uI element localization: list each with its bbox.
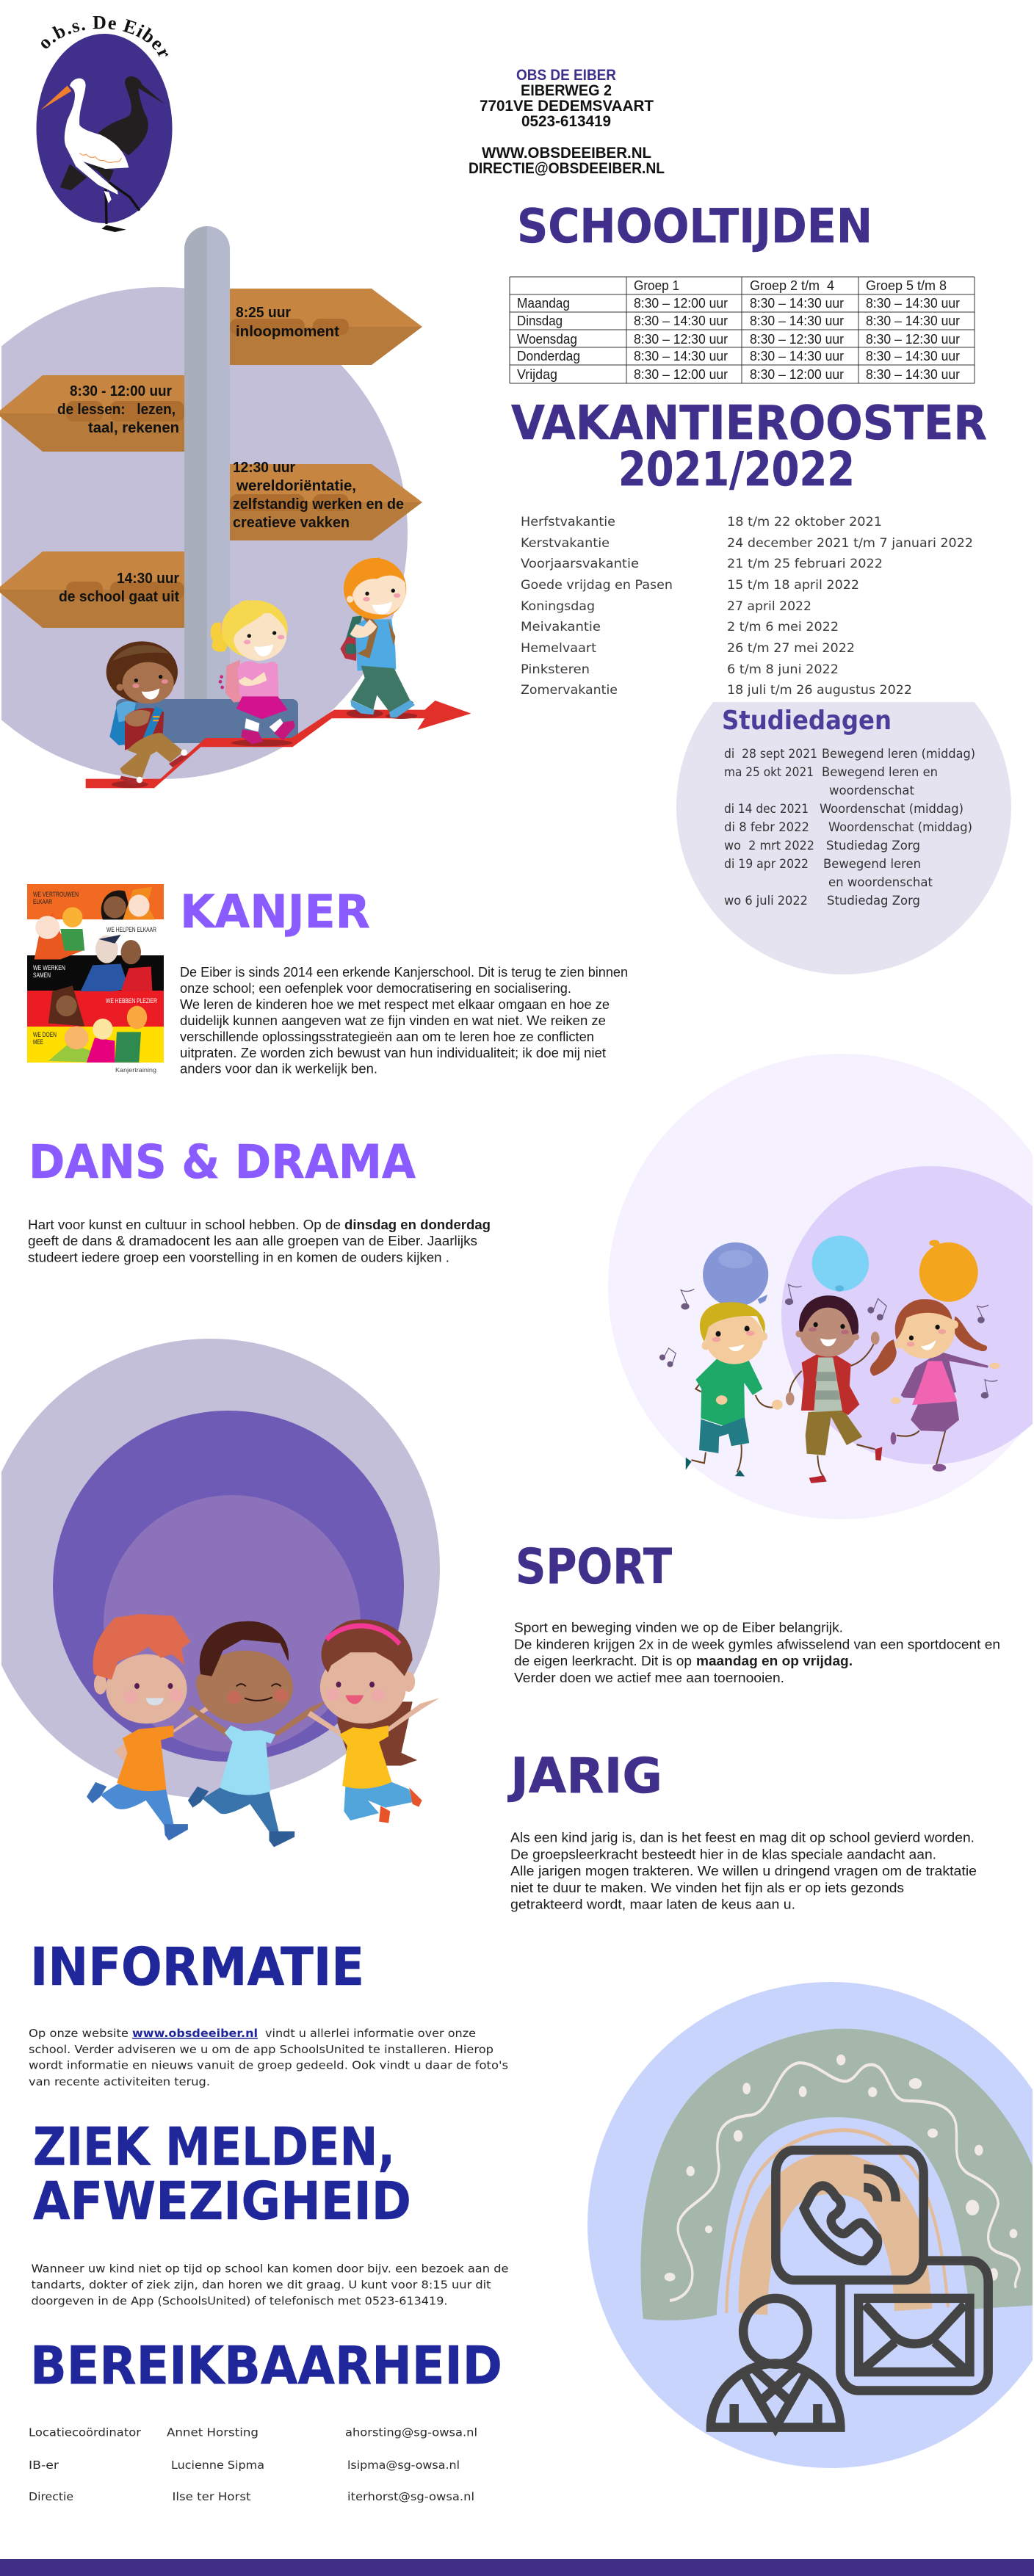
heading: sport: SPORT bbox=[516, 1538, 672, 1595]
text: dans en drama body: dinsdag en donderdag bbox=[344, 1218, 491, 1232]
balloon: blue bbox=[703, 1242, 768, 1306]
studiedagen title: Studiedagen bbox=[722, 706, 892, 736]
list: vacations bbox=[521, 515, 973, 698]
heading: vakantierooster bbox=[511, 396, 987, 497]
text: kanjer body bbox=[180, 965, 628, 1077]
poster: kanjer rules: WE VERTROUWEN bbox=[33, 891, 79, 898]
table: school times: 8:30 – 12:30 uur bbox=[750, 332, 844, 347]
table: school times: 8:30 – 12:00 uur bbox=[634, 367, 728, 382]
text: kanjer body: anders voor dan ik werkelijk ben. bbox=[180, 1062, 377, 1077]
studiedagen list bbox=[724, 747, 975, 908]
contact list: lsipma@sg-owsa.nl bbox=[347, 2459, 460, 2472]
sign: 14:30 de school gaat uit: 14:30 uur bbox=[117, 571, 179, 587]
table: school times: 8:30 – 14:30 uur bbox=[634, 349, 728, 363]
heading: ziek melden, afwezigheid: ZIEK MELDEN, bbox=[33, 2116, 395, 2177]
poster: kanjer rules: WE DOEN bbox=[33, 1031, 57, 1038]
text: sport body: De kinderen krijgen 2x in de week gymles afwisselend van een sportdocent en bbox=[514, 1638, 1000, 1652]
table: school times: Vrijdag bbox=[517, 367, 557, 382]
poster: kanjer rules: MEE bbox=[33, 1038, 43, 1046]
list: vacations: 15 t/m 18 april 2022 bbox=[727, 578, 859, 593]
studiedagen list: Studiedag Zorg bbox=[826, 839, 920, 853]
sign: 8:25 inloopmoment: 8:25 uur bbox=[236, 305, 291, 321]
table: school times: Woensdag bbox=[517, 332, 577, 347]
text: jarig body: Als een kind jarig is, dan is het feest en mag dit op school gevierd worden. bbox=[510, 1830, 975, 1845]
text: informatie body: www.obsdeeiber.nl bbox=[132, 2027, 258, 2040]
address block: 7701VE DEDEMSVAART bbox=[480, 98, 654, 115]
heading: kanjer: KANJER bbox=[180, 885, 370, 938]
text: ziek melden body: Wanneer uw kind niet op tijd op school kan komen door bijv. een bezoek aan de bbox=[31, 2262, 508, 2275]
text: jarig body: Alle jarigen mogen trakteren. We willen u dringend vragen om de traktatie bbox=[510, 1864, 977, 1878]
text: kanjer body: De Eiber is sinds 2014 een erkende Kanjerschool. Dit is terug te zien binnen bbox=[180, 965, 628, 980]
table: school times: Groep 2 t/m 4 bbox=[750, 278, 834, 293]
studiedagen list: Bewegend leren (middag) bbox=[822, 747, 975, 761]
table: school times: 8:30 – 12:30 uur bbox=[634, 332, 728, 347]
panel: studiedagen bbox=[676, 702, 1011, 974]
address block: WWW.OBSDEEIBER.NL bbox=[482, 145, 651, 162]
red stair arrow bbox=[86, 701, 471, 788]
poster: kanjer rules: SAMEN bbox=[33, 972, 51, 979]
sign: 8:30 - 12:00 de lessen bbox=[0, 375, 184, 452]
studiedagen list: Bewegend leren en bbox=[822, 765, 938, 779]
text: informatie body bbox=[29, 2027, 508, 2088]
table: school times: Donderdag bbox=[517, 349, 580, 363]
list: vacations: Meivakantie bbox=[521, 620, 601, 634]
poster: kanjer rules: Kanjertraining bbox=[115, 1067, 156, 1074]
studiedagen list: Studiedag Zorg bbox=[827, 894, 920, 908]
text: kanjer body: verschillende oplossingsstrategieën aan om te leren hoe ze conflicten bbox=[180, 1030, 594, 1044]
contact list: Annet Horsting bbox=[167, 2426, 258, 2439]
address block: OBS DE EIBER bbox=[516, 67, 616, 84]
address block: 0523-613419 bbox=[521, 113, 611, 130]
text: sport body: Verder doen we actief mee aan toernooien. bbox=[514, 1671, 784, 1685]
list: vacations: Goede vrijdag en Pasen bbox=[521, 578, 673, 593]
text: informatie body: wordt informatie en nieuws vanuit de groep gedeeld. Ook vindt u daar de foto's bbox=[29, 2059, 508, 2072]
text: ziek melden body: doorgeven in de App (SchoolsUnited) of telefonisch met 0523-613419. bbox=[31, 2295, 448, 2308]
list: vacations: Zomervakantie bbox=[521, 683, 618, 698]
sign: 14:30 de school gaat uit bbox=[0, 551, 184, 628]
table: school times: 8:30 – 14:30 uur bbox=[750, 349, 844, 363]
list: vacations: Hemelvaart bbox=[521, 641, 596, 656]
text: kanjer body: duidelijk kunnen aangeven wat ze fijn vinden en wat niet. We reiken ze bbox=[180, 1013, 606, 1028]
heading: bereikbaarheid: BEREIKBAARHEID bbox=[30, 2335, 502, 2396]
text: jarig body: niet te duur te maken. We vinden het fijn als er op iets gezonds bbox=[510, 1881, 904, 1895]
peach arch bbox=[739, 2154, 933, 2315]
list: vacations: 24 december 2021 t/m 7 januari 2022 bbox=[727, 536, 973, 551]
contact list: Locatiecoördinator bbox=[29, 2426, 142, 2439]
child: red-haired boy bbox=[87, 1614, 223, 1840]
table: school times: 8:30 – 12:30 uur bbox=[866, 332, 960, 347]
sign: 8:30 - 12:00 de lessen: taal, rekenen bbox=[88, 420, 179, 436]
address block: DIRECTIE@OBSDEEIBER.NL bbox=[469, 160, 665, 177]
sign: 8:30 - 12:00 de lessen: de lessen: lezen, bbox=[57, 402, 176, 418]
poster: kanjer rules: WE HEBBEN PLEZIER bbox=[106, 997, 157, 1005]
child: girl with headband bbox=[308, 1619, 440, 1823]
text: sport body: maandag en op vrijdag. bbox=[696, 1654, 853, 1668]
text: kanjer body: We leren de kinderen hoe we met respect met elkaar omgaan en hoe ze bbox=[180, 997, 610, 1012]
background circle behind signpost bbox=[0, 287, 408, 779]
contact list: Lucienne Sipma bbox=[171, 2459, 264, 2472]
sign: 12:30 wereldorientatie: 12:30 uur bbox=[233, 460, 295, 476]
child: dark-haired boy bbox=[188, 1621, 328, 1847]
squiggle and dots bbox=[665, 2055, 1019, 2301]
text: ziek melden body bbox=[31, 2262, 508, 2308]
signpost with schedule arrows bbox=[0, 226, 422, 743]
music notes bbox=[660, 1284, 997, 1398]
studiedagen list: di 14 dec 2021 bbox=[724, 802, 809, 816]
sign: 8:25 inloopmoment: inloopmoment bbox=[236, 324, 339, 340]
heading: vakantierooster: VAKANTIEROOSTER bbox=[511, 396, 987, 451]
address block bbox=[469, 67, 665, 177]
table: school times: 8:30 – 14:30 uur bbox=[866, 349, 960, 363]
table: school times: 8:30 – 14:30 uur bbox=[866, 314, 960, 328]
table: school times: 8:30 – 12:00 uur bbox=[750, 367, 844, 382]
list: vacations: 27 april 2022 bbox=[727, 599, 811, 614]
list: vacations: 18 juli t/m 26 augustus 2022 bbox=[727, 683, 912, 698]
child: girl in purple bbox=[870, 1299, 1000, 1472]
text: informatie body: school. Verder adviseren we u om de app SchoolsUnited te installeren. Hierop bbox=[29, 2043, 494, 2056]
table: school times: 8:30 – 14:30 uur bbox=[750, 314, 844, 328]
logo: o.b.s. De Eiber bbox=[37, 16, 172, 232]
list: vacations: Herfstvakantie bbox=[521, 515, 615, 529]
illustration: dancing children with balloons bbox=[608, 1054, 1034, 1519]
sign: 14:30 de school gaat uit: de school gaat uit bbox=[59, 589, 179, 605]
heading: informatie: INFORMATIE bbox=[30, 1936, 364, 1997]
footer bar bbox=[0, 2559, 1034, 2576]
studiedagen list: Woordenschat (middag) bbox=[820, 802, 964, 816]
text: kanjer body: onze school; een oefenplek voor democratisering en socialisering. bbox=[180, 981, 571, 996]
heading: schooltijden: SCHOOLTIJDEN bbox=[517, 199, 872, 254]
sign: 12:30 wereldorientatie bbox=[230, 460, 422, 540]
table: school times bbox=[510, 277, 975, 383]
studiedagen list: wo 6 juli 2022 bbox=[724, 894, 808, 908]
sign: 8:30 - 12:00 de lessen: 8:30 - 12:00 uur bbox=[70, 383, 172, 399]
list: vacations: Kerstvakantie bbox=[521, 536, 610, 551]
text: dans en drama body: studeert iedere groep een voorstelling in en komen de ouders kijken . bbox=[28, 1250, 449, 1265]
text: sport body: de eigen leerkracht. Dit is op bbox=[514, 1654, 692, 1668]
poster: kanjer rules: ELKAAR bbox=[33, 898, 52, 905]
balloon: orange bbox=[919, 1240, 978, 1302]
signpost pole bbox=[116, 226, 298, 743]
text: informatie body: van recente activiteiten terug. bbox=[29, 2075, 210, 2088]
list: vacations: 18 t/m 22 oktober 2021 bbox=[727, 515, 882, 529]
child: left boy bbox=[106, 641, 189, 784]
text: jarig body: getrakteerd wordt, maar laten de keus aan u. bbox=[510, 1897, 795, 1912]
child: middle girl bbox=[211, 600, 295, 744]
table: school times: 8:30 – 14:30 uur bbox=[866, 296, 960, 311]
poster: kanjer rules: WE HELPEN ELKAAR bbox=[106, 926, 156, 933]
sign: 12:30 wereldorientatie: creatieve vakken bbox=[233, 515, 350, 531]
text: sport body bbox=[514, 1621, 1000, 1685]
text: ziek melden body: tandarts, dokter of ziek zijn, dan horen we dit graag. U kunt voor 8:15 uur dit bbox=[31, 2279, 491, 2292]
heading: ziek melden, afwezigheid: AFWEZIGHEID bbox=[33, 2171, 411, 2232]
list: vacations: 26 t/m 27 mei 2022 bbox=[727, 641, 855, 656]
table: school times: 8:30 – 14:30 uur bbox=[750, 296, 844, 311]
sign: 12:30 wereldorientatie: zelfstandig werken en de bbox=[233, 496, 404, 513]
table: school times: 8:30 – 14:30 uur bbox=[634, 314, 728, 328]
text: dans en drama body: Hart voor kunst en cultuur in school hebben. Op de bbox=[28, 1218, 341, 1232]
heading: vakantierooster: 2021/2022 bbox=[618, 442, 855, 497]
list: vacations: 2 t/m 6 mei 2022 bbox=[727, 620, 839, 634]
walking children on red arrow bbox=[86, 557, 471, 788]
logo: o.b.s. De Eiber: o.b.s. De Eiber bbox=[41, 16, 169, 57]
table: school times: Dinsdag bbox=[517, 314, 563, 328]
list: vacations: 6 t/m 8 juni 2022 bbox=[727, 662, 839, 677]
text: dans en drama body: geeft de dans & dramadocent les aan alle groepen van de Eiber. Jaarlijks bbox=[28, 1234, 477, 1248]
text: dans en drama body bbox=[28, 1218, 491, 1265]
table: school times: Maandag bbox=[517, 296, 570, 311]
poster: kanjer rules: WE WERKEN bbox=[33, 964, 65, 972]
studiedagen list: en woordenschat bbox=[828, 875, 933, 889]
sign: 12:30 wereldorientatie: wereldoriëntatie, bbox=[236, 478, 356, 494]
table: school times: Groep 1 bbox=[634, 278, 679, 293]
child: right boy bbox=[340, 557, 415, 717]
heading: ziek melden, afwezigheid bbox=[33, 2116, 411, 2232]
text: kanjer body: uitpraten. Ze worden zich bewust van hun individualiteit; ik doe mij niet bbox=[180, 1046, 606, 1060]
contact list: iterhorst@sg-owsa.nl bbox=[347, 2490, 474, 2503]
studiedagen list: di 8 febr 2022 bbox=[724, 820, 809, 834]
studiedagen list: ma 25 okt 2021 bbox=[724, 765, 814, 779]
list: vacations: Voorjaarsvakantie bbox=[521, 557, 639, 571]
list: vacations: 21 t/m 25 februari 2022 bbox=[727, 557, 883, 571]
list: vacations: Pinksteren bbox=[521, 662, 590, 677]
studiedagen list: di 19 apr 2022 bbox=[724, 857, 809, 871]
text: jarig body: De groepsleerkracht besteedt hier in de klas speciale aandacht aan. bbox=[510, 1848, 936, 1862]
heading: jarig: JARIG bbox=[507, 1748, 662, 1804]
balloon: light blue bbox=[812, 1236, 869, 1292]
text: informatie body: Op onze website bbox=[29, 2027, 129, 2040]
contact list: Directie bbox=[29, 2490, 73, 2503]
sign: 8:25 inloopmoment bbox=[230, 289, 422, 365]
address block: EIBERWEG 2 bbox=[521, 82, 612, 99]
studiedagen list: Woordenschat (middag) bbox=[828, 820, 972, 834]
table: school times: Groep 5 t/m 8 bbox=[866, 278, 947, 293]
contact list: Ilse ter Horst bbox=[172, 2490, 251, 2503]
child: boy in red jacket bbox=[786, 1295, 882, 1483]
studiedagen list: woordenschat bbox=[829, 784, 915, 797]
contact list: IB-er bbox=[29, 2459, 59, 2472]
contact list bbox=[29, 2426, 477, 2503]
studiedagen list: wo 2 mrt 2022 bbox=[724, 839, 814, 853]
poster: kanjer rules bbox=[27, 884, 164, 1074]
illustration: three running children in circles bbox=[0, 1339, 440, 1847]
contact list: ahorsting@sg-owsa.nl bbox=[345, 2426, 477, 2439]
green arch bbox=[640, 2029, 1034, 2320]
list: vacations: Koningsdag bbox=[521, 599, 595, 614]
studiedagen list: di 28 sept 2021 bbox=[724, 747, 817, 761]
illustration: contact icons on blue circle bbox=[588, 1982, 1034, 2468]
table: school times: 8:30 – 12:00 uur bbox=[634, 296, 728, 311]
table: school times: 8:30 – 14:30 uur bbox=[866, 367, 960, 382]
child: boy in green bbox=[686, 1302, 783, 1477]
text: informatie body: vindt u allerlei informatie over onze bbox=[265, 2027, 476, 2040]
heading: dans en drama: DANS & DRAMA bbox=[29, 1135, 416, 1189]
text: sport body: Sport en beweging vinden we op de Eiber belangrijk. bbox=[514, 1621, 843, 1635]
text: jarig body bbox=[510, 1830, 977, 1912]
studiedagen list: Bewegend leren bbox=[823, 857, 921, 871]
icon: phone screen, envelope and person bbox=[711, 2150, 988, 2428]
